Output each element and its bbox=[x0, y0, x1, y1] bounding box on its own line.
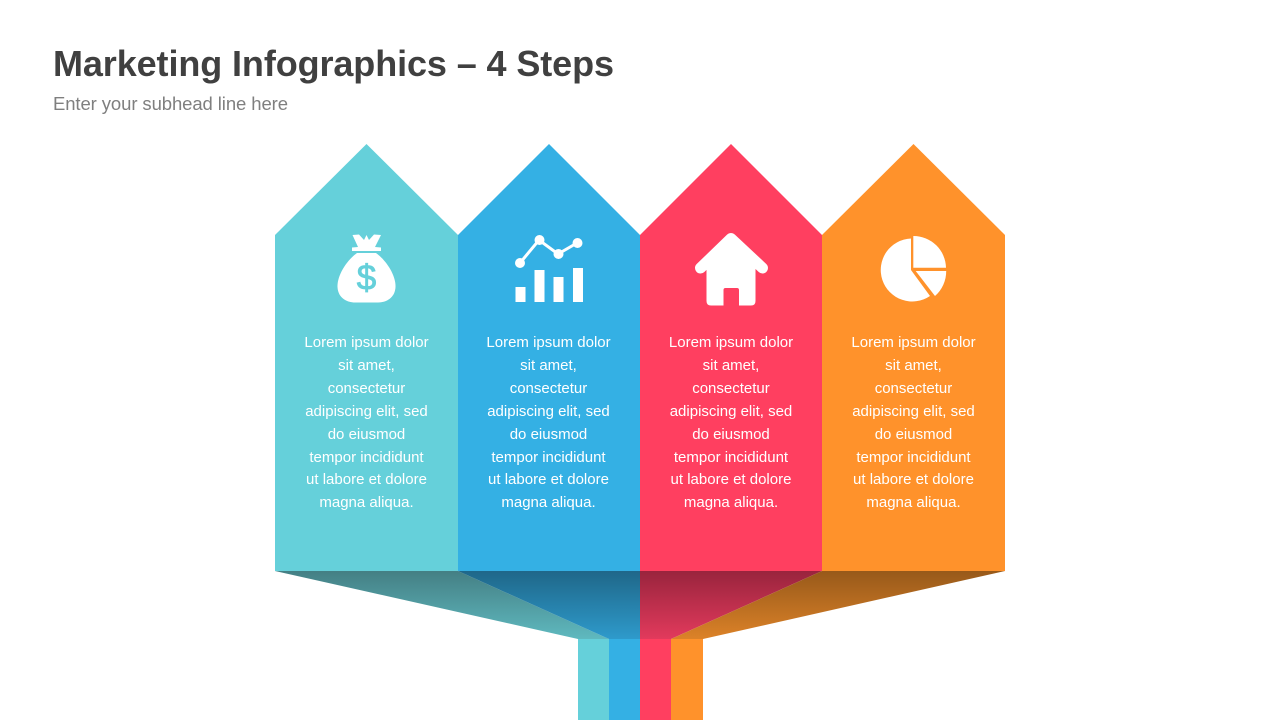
text block: step 4: consectetur bbox=[875, 380, 952, 397]
text block: step 1 bbox=[304, 334, 429, 511]
text block: step 1: sit amet, bbox=[338, 357, 395, 374]
text block: step 2: adipiscing elit, sed bbox=[487, 403, 610, 420]
icon: money bag bbox=[337, 234, 396, 302]
title: Marketing Infographics – 4 Steps bbox=[53, 43, 614, 84]
icon: house bbox=[700, 238, 762, 306]
icon: pie chart bbox=[881, 236, 946, 301]
icon: money bag: $ bbox=[357, 258, 376, 298]
text block: step 3: sit amet, bbox=[703, 357, 759, 374]
text block: step 2: consectetur bbox=[510, 380, 587, 397]
text block: step 4: sit amet, bbox=[885, 357, 942, 374]
text block: step 3: do eiusmod bbox=[692, 426, 770, 443]
text block: step 2 bbox=[486, 334, 611, 511]
text block: step 4: Lorem ipsum dolor bbox=[851, 334, 976, 351]
text block: step 4: ut labore et dolore bbox=[853, 471, 974, 488]
panel: step 4 orange bbox=[822, 144, 1005, 571]
text block: step 1: ut labore et dolore bbox=[306, 471, 427, 488]
text block: step 3 bbox=[669, 334, 793, 511]
subtitle: Enter your subhead line here bbox=[53, 93, 288, 114]
panel: step 3 red bbox=[640, 144, 822, 571]
text block: step 3: consectetur bbox=[692, 380, 770, 397]
text block: step 3: magna aliqua. bbox=[684, 494, 778, 511]
text block: step 4: do eiusmod bbox=[875, 426, 952, 443]
text block: step 1: adipiscing elit, sed bbox=[305, 403, 428, 420]
icon: line and bar chart bbox=[515, 235, 583, 302]
text block: step 3: tempor incididunt bbox=[674, 449, 789, 466]
text block: step 1: do eiusmod bbox=[328, 426, 405, 443]
text block: step 4: magna aliqua. bbox=[866, 494, 961, 511]
text block: step 2: ut labore et dolore bbox=[488, 471, 609, 488]
text block: step 2: tempor incididunt bbox=[491, 449, 606, 466]
text block: step 2: sit amet, bbox=[520, 357, 577, 374]
text block: step 1: tempor incididunt bbox=[309, 449, 424, 466]
panel: step 1 teal bbox=[275, 144, 458, 571]
text block: step 2: magna aliqua. bbox=[501, 494, 596, 511]
text block: step 4: tempor incididunt bbox=[856, 449, 971, 466]
panel: step 2 blue bbox=[458, 144, 640, 571]
text block: step 4: adipiscing elit, sed bbox=[852, 403, 975, 420]
text block: step 4 bbox=[851, 334, 976, 511]
text block: step 1: magna aliqua. bbox=[319, 494, 414, 511]
text block: step 3: ut labore et dolore bbox=[671, 471, 791, 488]
funnel stem: four colored strips bbox=[578, 639, 703, 720]
funnel: converging shadow bands bbox=[275, 571, 1005, 639]
text block: step 2: Lorem ipsum dolor bbox=[486, 334, 611, 351]
text block: step 3: adipiscing elit, sed bbox=[670, 403, 792, 420]
text block: step 1: consectetur bbox=[328, 380, 405, 397]
text block: step 1: Lorem ipsum dolor bbox=[304, 334, 429, 351]
text block: step 2: do eiusmod bbox=[510, 426, 587, 443]
text block: step 3: Lorem ipsum dolor bbox=[669, 334, 793, 351]
